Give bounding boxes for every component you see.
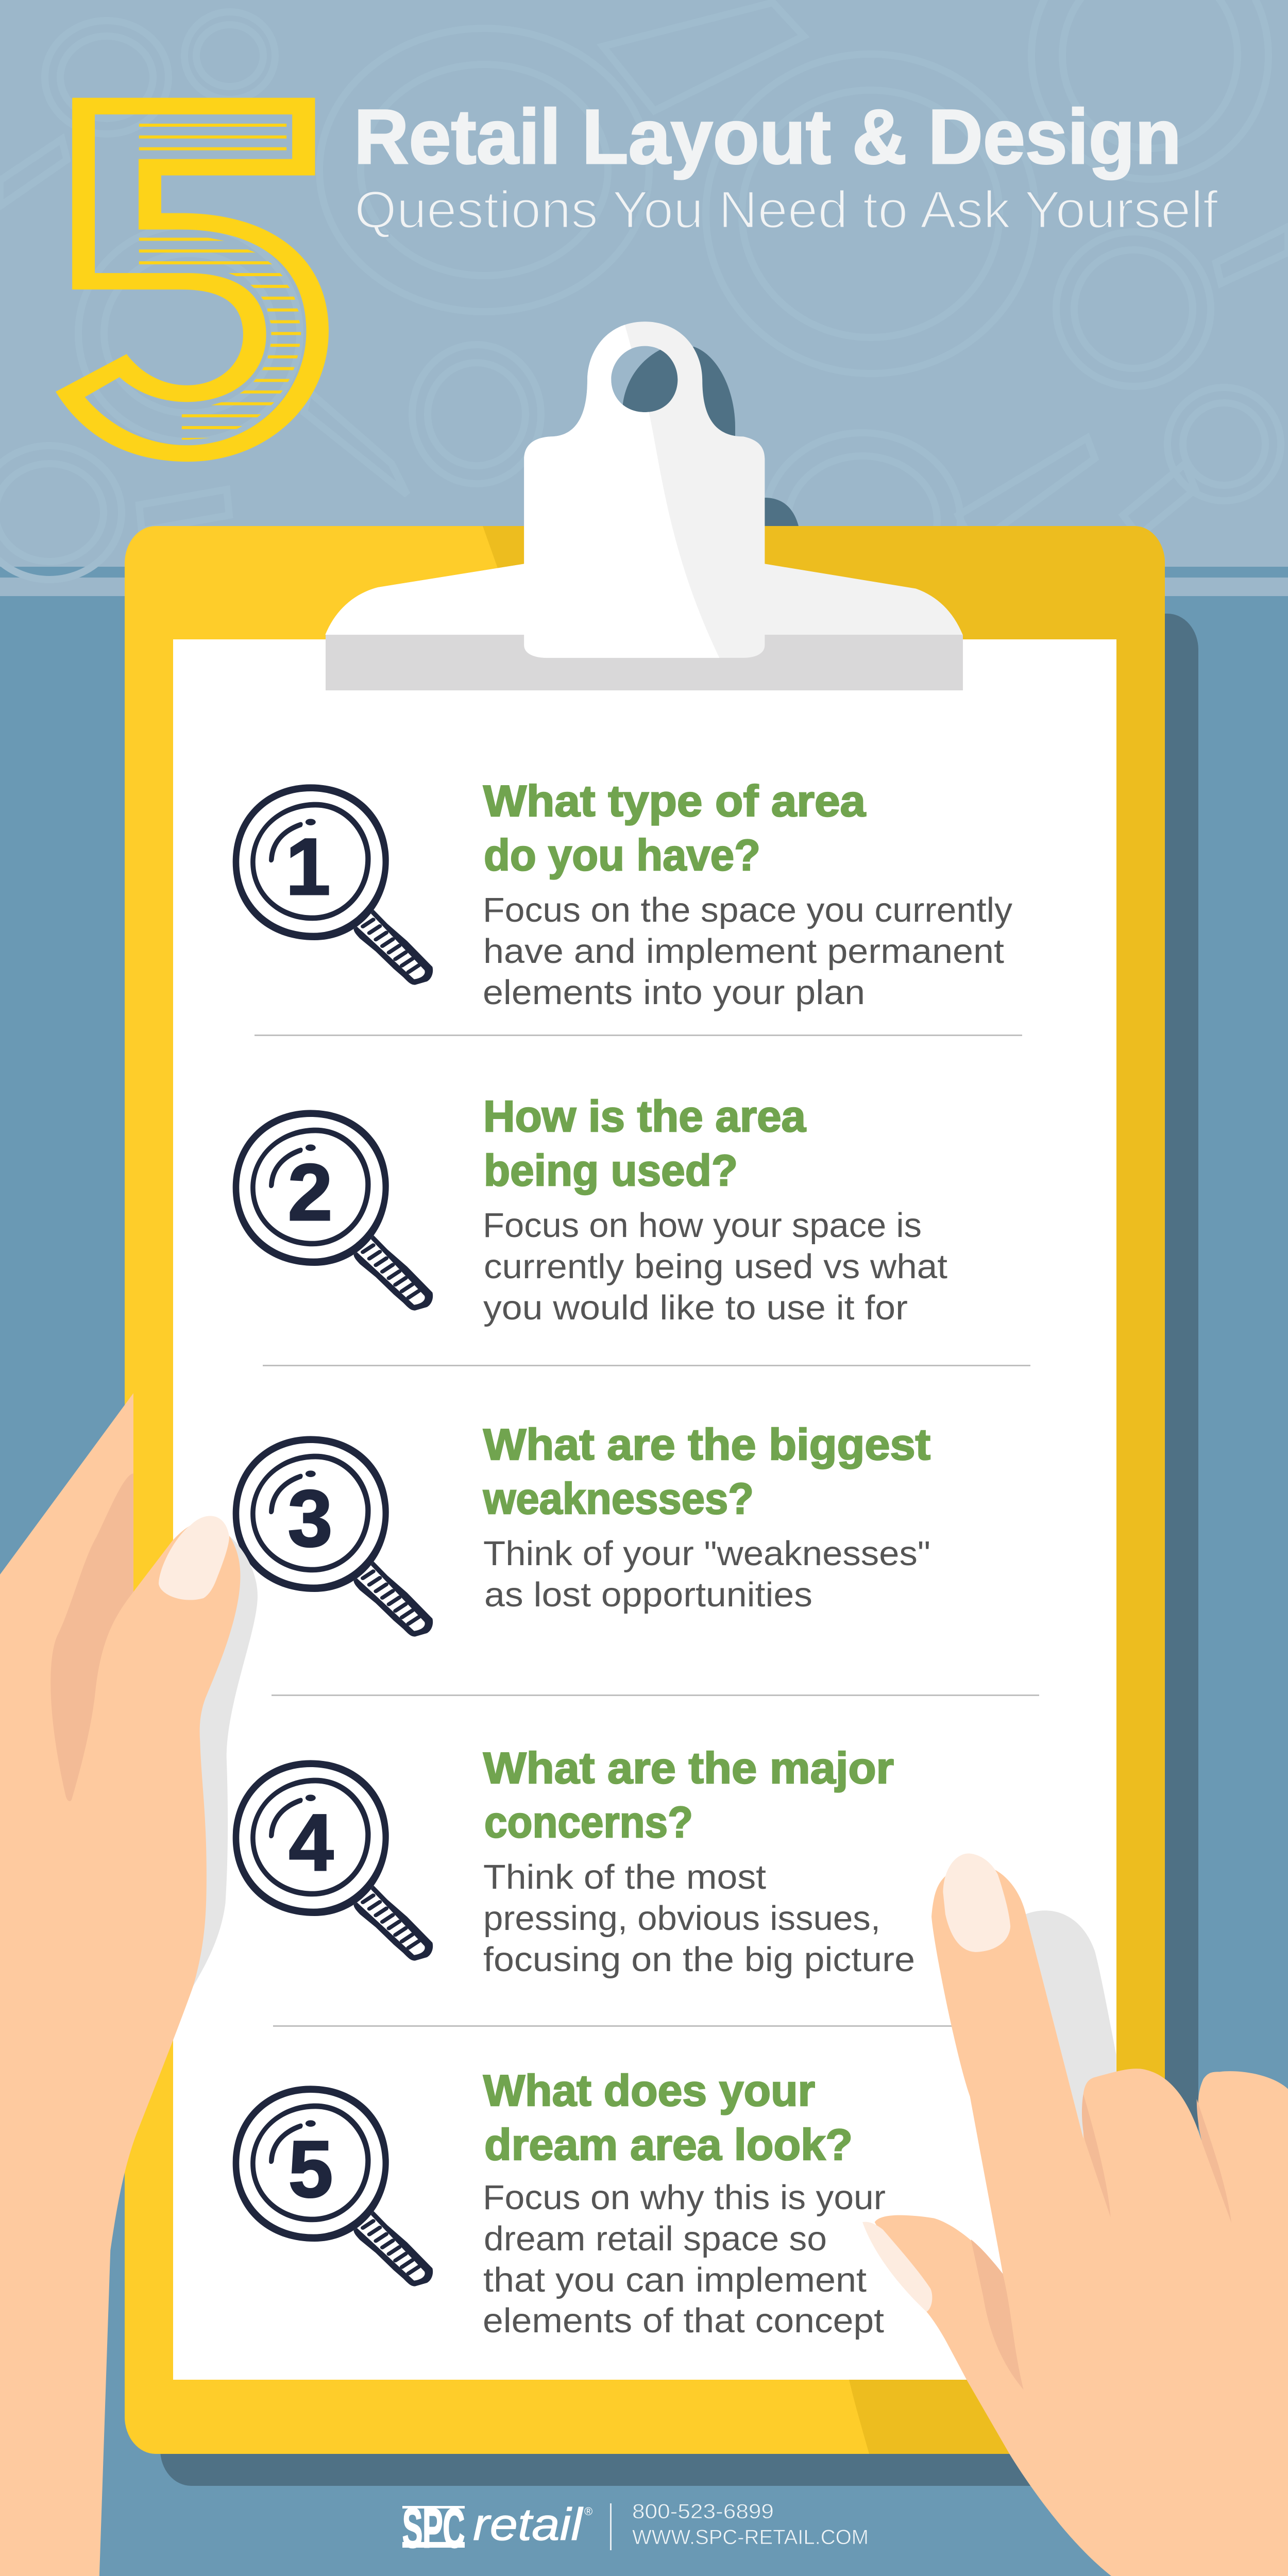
body 1: elements into your plan [483,973,865,1012]
heading 1 [483,777,866,880]
question 5 [233,2066,886,2340]
heading 3: What are the biggest [483,1420,930,1469]
finger creases [971,2240,1024,2389]
background: lower wall [0,567,1288,2576]
metal clip [325,321,963,658]
body 5: dream retail space so [484,2219,827,2258]
body 2: you would like to use it for [483,1289,908,1327]
icon: magnifier 3: 3 [288,1474,332,1564]
body 2: currently being used vs what [484,1247,947,1286]
icon: magnifier 4: 4 [289,1798,333,1888]
contact details: WWW.SPC-RETAIL.COM [632,2526,869,2549]
background: upper wall [0,0,1288,567]
logo: SPC retail: ® [584,2505,592,2518]
body 5 [483,2178,886,2340]
left hand holding clipboard [0,1393,258,2576]
right hand holding clipboard [862,1853,1288,2576]
contact details [632,2500,869,2549]
body 2: Focus on how your space is [483,1206,922,1245]
clipboard board [125,526,1165,2454]
body 4: Think of the most [483,1858,766,1896]
clip shadow on wall [623,347,799,528]
icon: magnifier 2 [233,1110,433,1311]
heading 2 [483,1092,806,1195]
background: wall band [0,578,1288,596]
heading 1: What type of area [483,777,866,826]
icon: magnifier 5: 5 [289,2125,333,2214]
heading 3 [483,1420,930,1523]
heading 5: What does your [483,2066,815,2115]
heading 4 [483,1744,894,1847]
board shaded side [483,526,1165,2454]
icon: magnifier 1: 1 [286,822,330,912]
body 5: that you can implement [483,2261,867,2299]
hand shadow on paper [1026,1910,1116,2138]
title line 2: Questions You Need to Ask Yourself [354,180,1218,239]
contact details: 800-523-6899 [632,2500,774,2523]
body 1: Focus on the space you currently [483,891,1013,929]
thumb nail [159,1516,229,1600]
icon: magnifier 3 [233,1436,433,1637]
background magnifier pattern [0,0,1288,608]
hand shadow on paper [184,1537,258,1986]
body 5: Focus on why this is your [483,2178,886,2217]
question 3 [233,1420,930,1637]
heading 5 [483,2066,853,2170]
right hand shape [875,1867,1288,2576]
index finger nail [943,1853,1010,1952]
paper sheet [173,639,1116,2380]
icon: magnifier 1 [233,784,433,985]
body 2 [483,1206,947,1327]
question 1 [233,777,1013,1012]
logo: SPC retail: SPC [402,2497,465,2559]
left hand shape [0,1393,240,2576]
body 3: as lost opportunities [484,1575,812,1614]
heading 2: being used? [484,1146,738,1195]
heading 4: What are the major [483,1744,894,1793]
body 1: have and implement permanent [483,932,1004,971]
heading 2: How is the area [483,1092,806,1141]
footer [402,2497,869,2559]
question 4 [233,1744,915,1979]
big yellow numeral 5 [56,98,329,462]
body 1 [483,891,1013,1012]
question 2 [233,1092,947,1327]
body 4: pressing, obvious issues, [483,1899,880,1938]
thumb nail [862,2222,932,2312]
body 3 [483,1534,930,1614]
body 4: focusing on the big picture [483,1940,915,1979]
logo: SPC retail [402,2497,592,2559]
title [56,93,1218,462]
body 5: elements of that concept [483,2301,884,2340]
body 3: Think of your "weaknesses" [483,1534,930,1573]
icon: magnifier 4 [233,1760,433,1961]
heading 5: dream area look? [484,2121,853,2170]
heading 4: concerns? [484,1798,693,1847]
body 4 [483,1858,915,1979]
heading 3: weaknesses? [483,1475,754,1523]
clipboard shadow [160,614,1198,2486]
clip base plate [326,635,963,690]
icon: magnifier 2: 2 [288,1148,332,1238]
palm crease [50,1473,133,1801]
title line 1: Retail Layout & Design [354,93,1181,180]
icon: magnifier 5 [233,2086,433,2286]
logo: SPC retail: retail [473,2499,584,2550]
heading 1: do you have? [484,831,760,880]
